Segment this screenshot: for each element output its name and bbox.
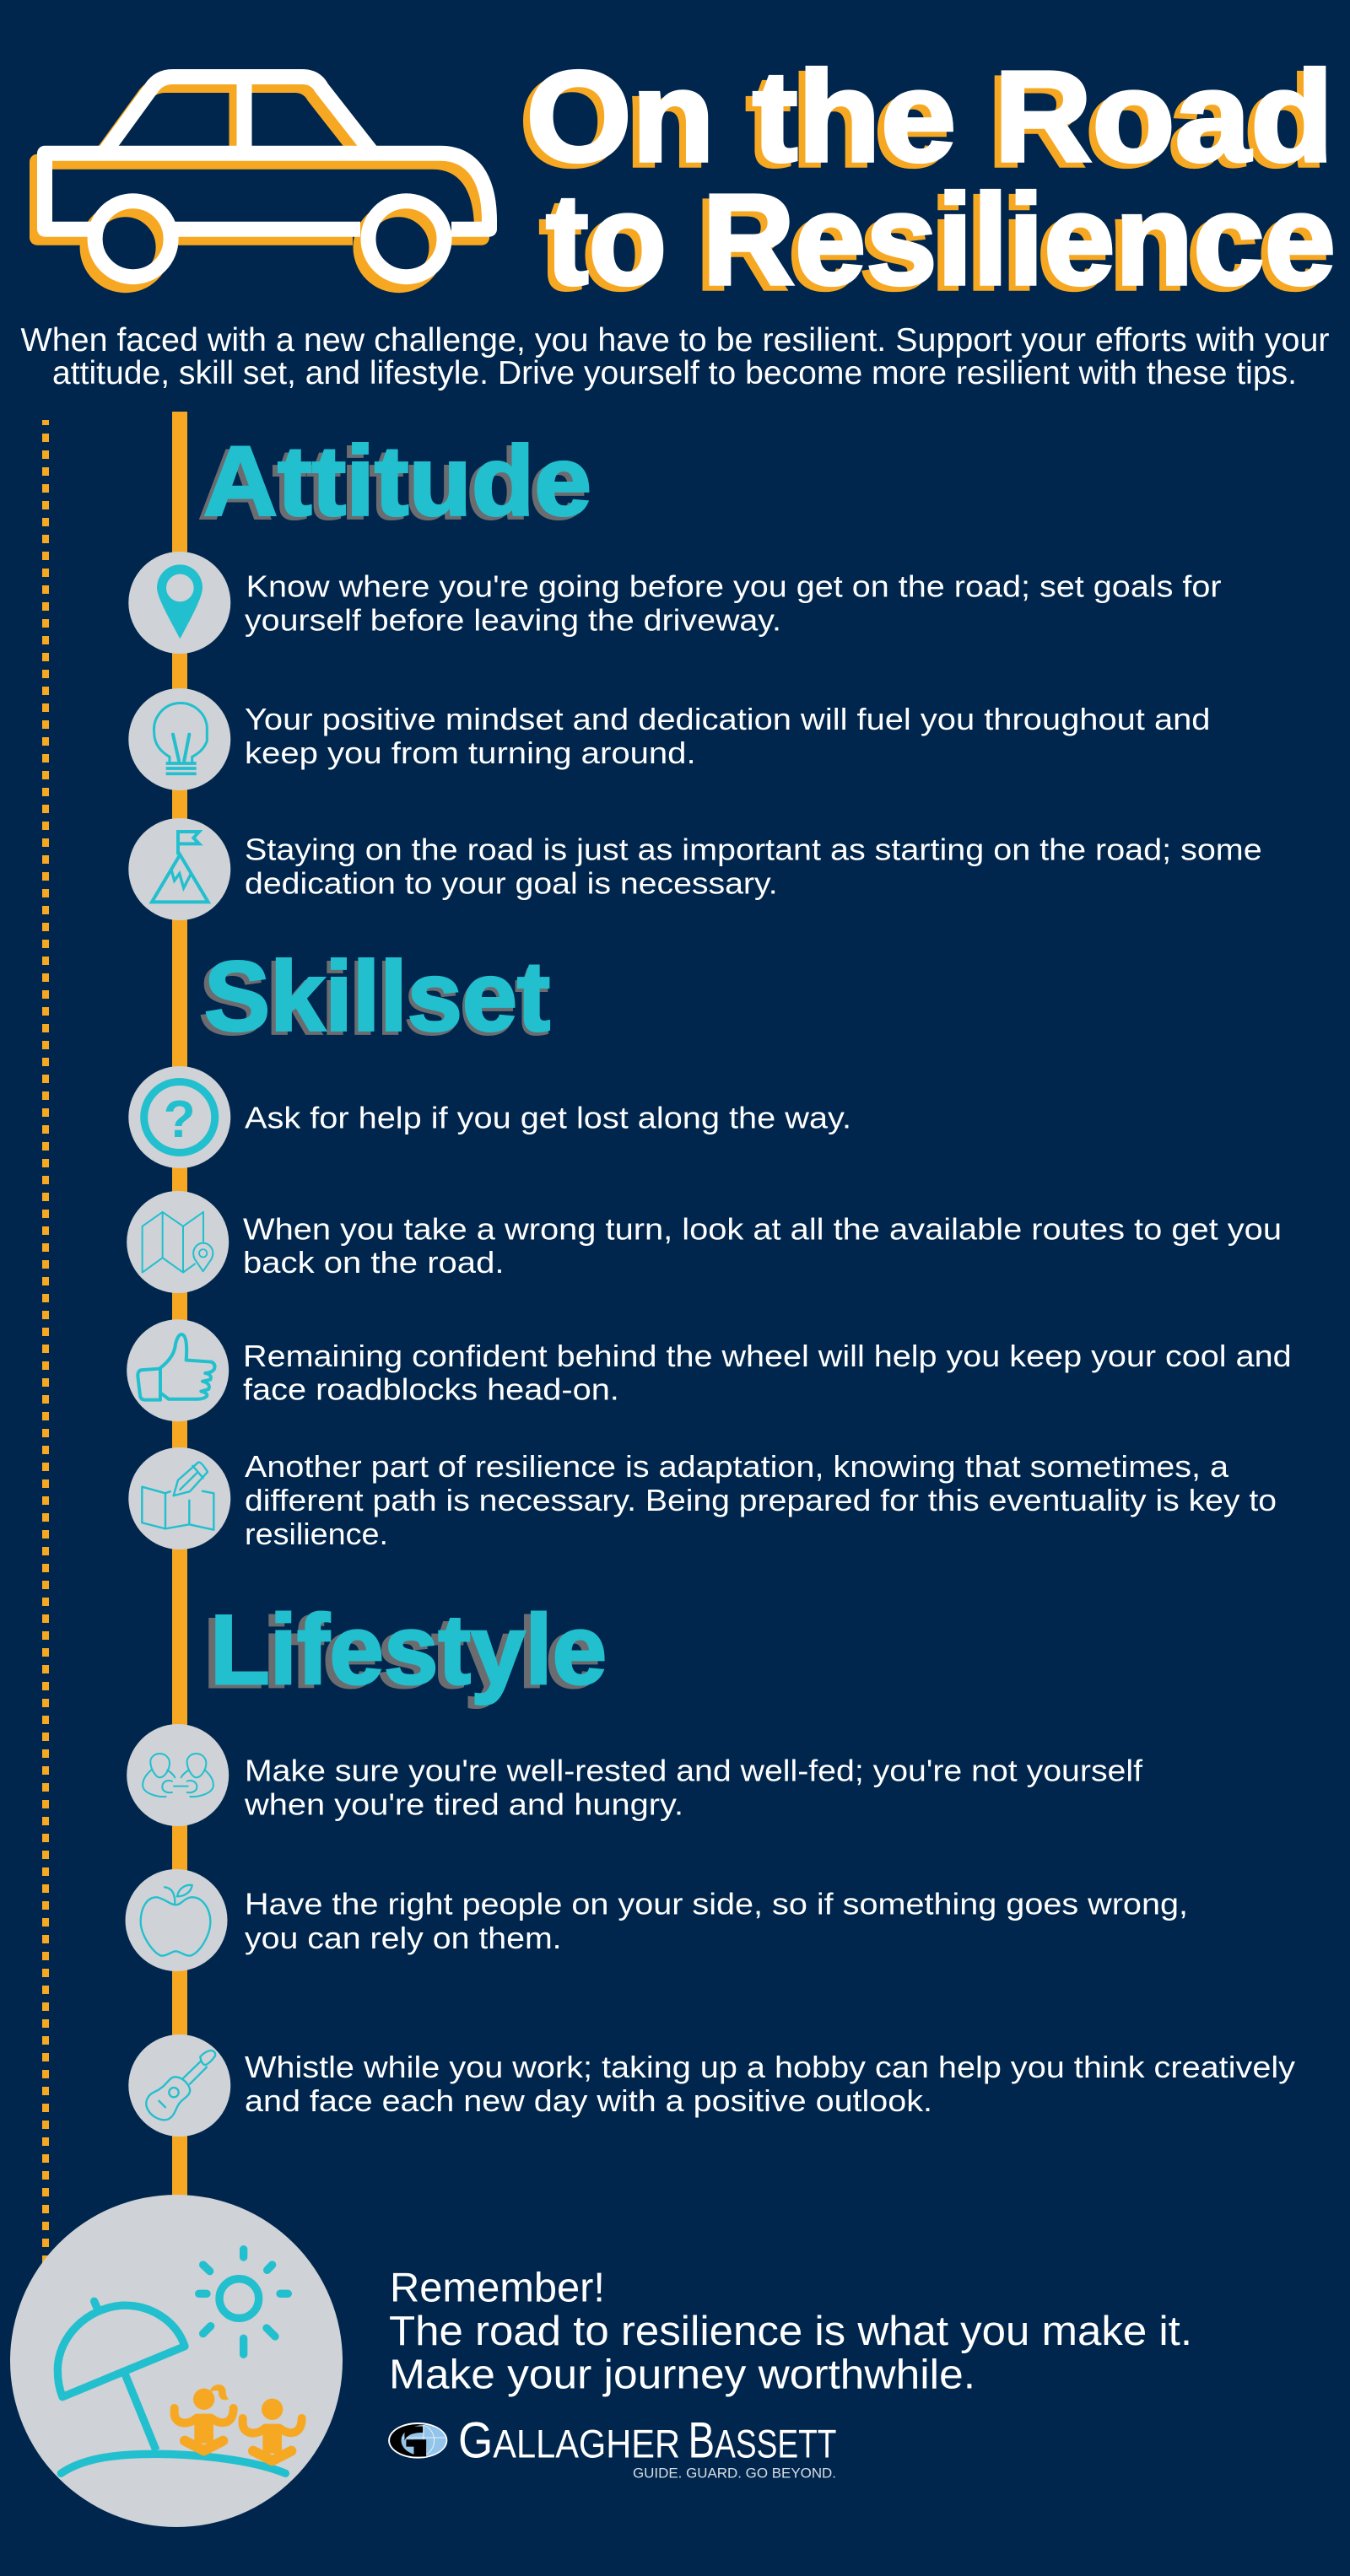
tip row: wrong turn: [127, 1191, 1282, 1293]
tip text: [245, 833, 1262, 901]
destination: beach circle illustration: [10, 2195, 343, 2527]
tip text: Another part of resilience is adaptation, knowing that sometimes, a: [245, 1449, 1229, 1484]
heading: Lifestyle: Lifestyle: [210, 1594, 607, 1705]
tip text: [245, 1886, 1188, 1955]
tip text: Make sure you're well-rested and well-fed; you're not yourself: [245, 1754, 1143, 1788]
tip text: back on the road.: [243, 1245, 505, 1280]
tip row: adaptation: [128, 1447, 1277, 1551]
icon: map with pencil: [128, 1447, 230, 1549]
logo tagline: GUIDE. GUARD. GO BEYOND.: [633, 2466, 836, 2482]
heading: Attitude: Attitude: [203, 425, 591, 536]
car outline: [45, 77, 489, 277]
icon: apple: [125, 1869, 228, 1971]
tip text: When you take a wrong turn, look at all the available routes to get you: [243, 1212, 1282, 1247]
logo wordmark: GALLAGHER: [458, 2412, 680, 2468]
closing message: Remember!: [390, 2265, 605, 2310]
tip text: and face each new day with a positive outlook.: [245, 2083, 932, 2118]
intro text: When faced with a new challenge, you have to be resilient. Support your efforts with your: [20, 322, 1330, 358]
car shadow: [37, 85, 482, 285]
logo globe mark: [388, 2422, 447, 2459]
tip text: Your positive mindset and dedication will fuel you throughout and: [245, 702, 1210, 736]
icon: child meditating: [243, 2399, 302, 2460]
intro text: attitude, skill set, and lifestyle. Drive yourself to become more resilient with these tips.: [52, 355, 1297, 391]
tip text: different path is necessary. Being prepared for this eventuality is key to: [245, 1483, 1277, 1517]
heading: Skillset: Skillset: [204, 941, 550, 1052]
icon: guitar: [128, 2034, 230, 2137]
tip text: [243, 1212, 1282, 1280]
tip text: dedication to your goal is necessary.: [245, 866, 778, 901]
tip text: Remaining confident behind the wheel will help you keep your cool and: [243, 1339, 1292, 1373]
tip text: [245, 702, 1210, 770]
tip row: confident: [127, 1319, 1292, 1421]
tip text: [243, 1339, 1292, 1407]
tip text: Ask for help if you get lost along the way.: [245, 1100, 851, 1134]
title: to Resilience: [546, 168, 1336, 312]
icon: two people: [127, 1724, 229, 1826]
title: to Resilience: [539, 173, 1329, 317]
tip text: [244, 1754, 1143, 1822]
icon: light bulb: [128, 688, 230, 790]
icon: umbrella: [57, 2301, 185, 2450]
title: On the Road: [526, 45, 1333, 189]
icon: location pin: [128, 552, 230, 654]
tip row: mindset: [128, 688, 1210, 790]
icon: map with pin: [127, 1191, 229, 1293]
icon: question mark: ?: [164, 1091, 196, 1149]
icon: car: [37, 77, 489, 285]
icon: question mark: [128, 1066, 230, 1168]
closing message: [389, 2265, 1192, 2398]
tip text: keep you from turning around.: [245, 736, 696, 770]
closing message: Make your journey worthwhile.: [389, 2352, 975, 2398]
road: vertical orange line: [172, 412, 187, 2208]
tip row: goals: [128, 552, 1222, 654]
heading: Skillset: Skillset: [199, 945, 548, 1055]
tip row: rest and food: [127, 1724, 1143, 1826]
tip text: Have the right people on your side, so if something goes wrong,: [245, 1886, 1188, 1921]
tip text: [245, 2050, 1295, 2118]
tip text: [245, 569, 1222, 638]
logo wordmark: BASSETT: [688, 2412, 837, 2468]
tip row: hobby: [128, 2034, 1295, 2137]
heading: Lifestyle: Lifestyle: [203, 1598, 600, 1708]
logo: Gallagher Bassett: [388, 2412, 837, 2482]
logo wordmark: [458, 2412, 837, 2468]
title: [520, 45, 1336, 317]
tip text: face roadblocks head-on.: [243, 1372, 619, 1407]
tip row: right people: [125, 1869, 1188, 1971]
tip text: yourself before leaving the driveway.: [245, 603, 781, 638]
sand hill: [61, 2454, 285, 2473]
icon: sun: [199, 2250, 288, 2354]
icon: girl meditating: [175, 2385, 234, 2450]
dotted side line: [42, 420, 49, 2269]
closing message: The road to resilience is what you make it.: [389, 2309, 1192, 2354]
tip text: Whistle while you work; taking up a hobby can help you think creatively: [245, 2050, 1295, 2084]
tip text: Staying on the road is just as important as starting on the road; some: [245, 833, 1262, 867]
tip text: [245, 1449, 1277, 1551]
tip text: you can rely on them.: [245, 1921, 562, 1955]
icon: thumbs up: [127, 1319, 229, 1421]
tip row: staying on the road: [128, 818, 1262, 920]
heading: Attitude: Attitude: [198, 428, 586, 539]
title: On the Road: [520, 50, 1326, 194]
tip text: when you're tired and hungry.: [244, 1787, 683, 1822]
tip text: resilience.: [245, 1517, 388, 1551]
tip text: Know where you're going before you get on the road; set goals for: [246, 569, 1222, 604]
tip row: ask for help: [128, 1066, 851, 1168]
icon: mountain with flag: [128, 818, 230, 920]
intro text: [20, 322, 1330, 391]
